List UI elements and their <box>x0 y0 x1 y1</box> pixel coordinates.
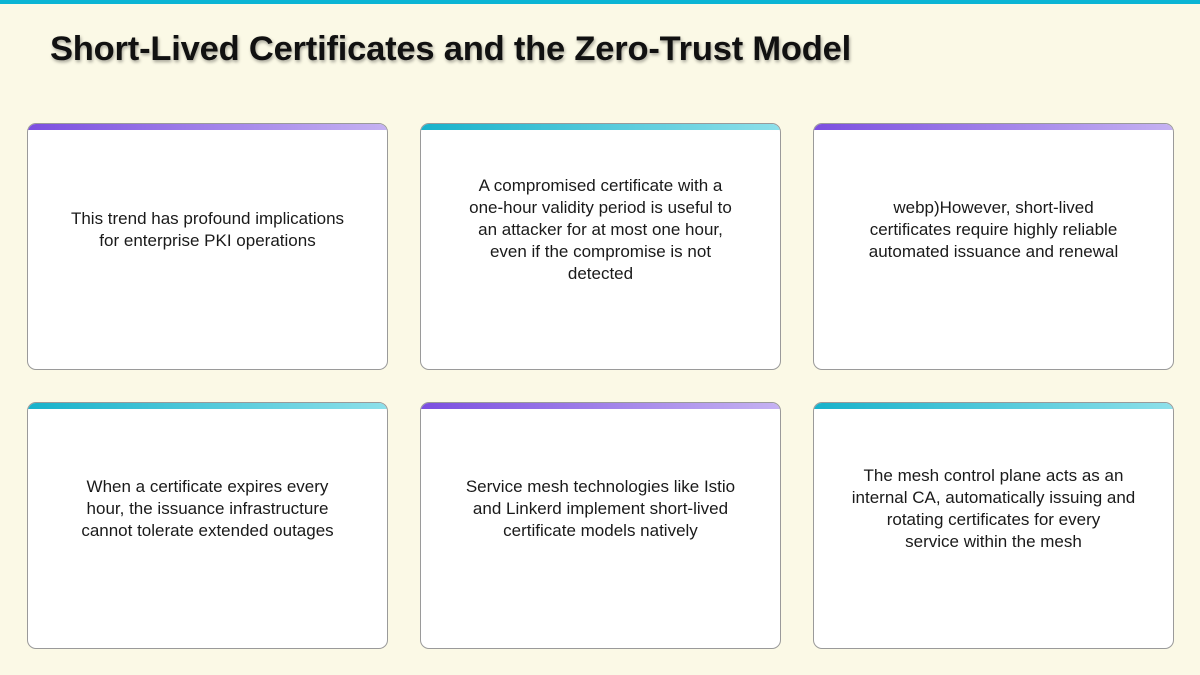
text: card 2: one-hour validity period is useful to <box>469 198 732 216</box>
text: card 6: service within the mesh <box>905 532 1082 550</box>
panel: card 5 <box>420 402 781 649</box>
text: card 4 <box>81 476 334 540</box>
title: Short-Lived Certificates and the Zero-Trust Model <box>50 30 851 68</box>
text: card 6: The mesh control plane acts as an <box>864 466 1123 484</box>
text: card 5 <box>466 476 735 540</box>
text: card 5: and Linkerd implement short-lived <box>473 498 728 518</box>
panel: card 4 <box>27 402 388 649</box>
panel: card 2 <box>420 123 781 370</box>
text: card 4: cannot tolerate extended outages <box>81 520 334 540</box>
text: card 3: automated issuance and renewal <box>869 242 1118 260</box>
text: card 2: detected <box>568 264 633 282</box>
text: card 3 <box>869 198 1118 260</box>
text: card 2: an attacker for at most one hour, <box>478 220 723 238</box>
text: card 4: When a certificate expires every <box>87 476 328 496</box>
text: card 3: certificates require highly reliable <box>870 220 1117 238</box>
panel: card 3 <box>813 123 1174 370</box>
text: card 2 <box>469 176 732 282</box>
panel: card 1 <box>27 123 388 370</box>
text: card 2: even if the compromise is not <box>490 242 711 260</box>
text: card 1: for enterprise PKI operations <box>99 230 316 250</box>
text: card 5: certificate models natively <box>503 520 698 540</box>
text: card 6: internal CA, automatically issuing and <box>852 488 1135 506</box>
text: card 3: webp)However, short-lived <box>893 198 1094 216</box>
text: card 4: hour, the issuance infrastructure <box>87 498 328 518</box>
text: card 5: Service mesh technologies like Istio <box>466 476 735 496</box>
text: card 1: This trend has profound implications <box>71 208 344 228</box>
text: card 1 <box>71 208 344 250</box>
text: card 2: A compromised certificate with a <box>479 176 722 194</box>
panel: card 6 <box>813 402 1174 649</box>
text: card 6: rotating certificates for every <box>887 510 1100 528</box>
text: card 6 <box>852 466 1135 550</box>
